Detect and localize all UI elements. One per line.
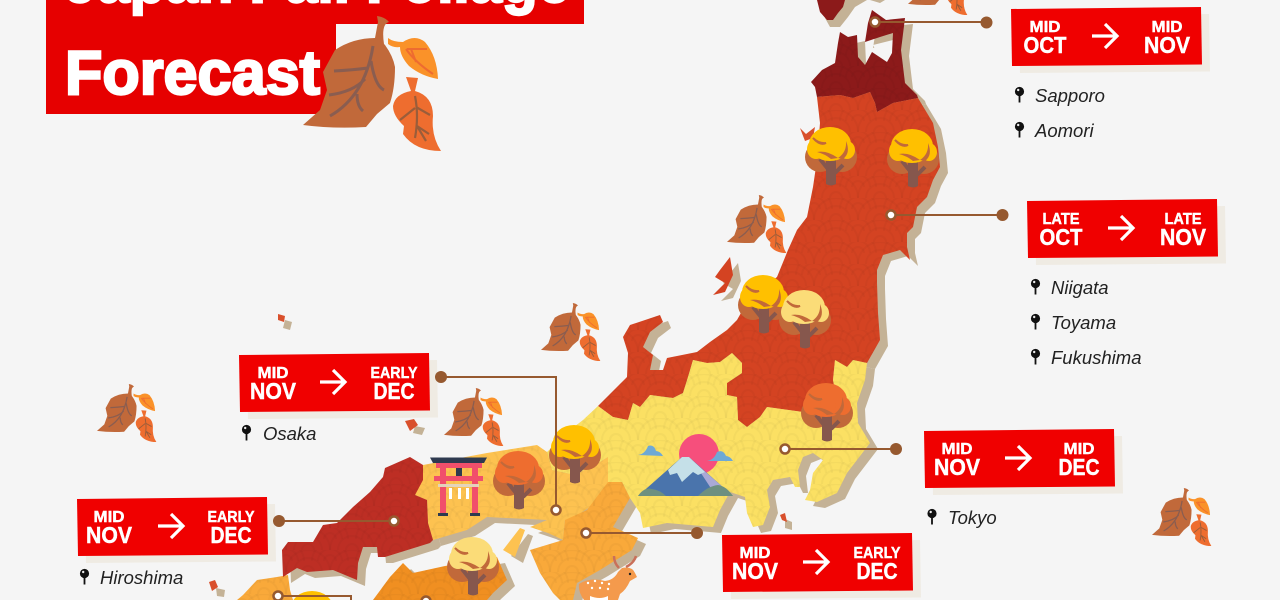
city: Sapporo: Sapporo bbox=[1035, 85, 1105, 106]
badge: late Oct to late Nov bbox=[1027, 199, 1226, 265]
connector: Sapporo Aomori bbox=[870, 16, 992, 28]
icon: leaves sea of Japan bbox=[541, 303, 600, 361]
region: Shikoku bbox=[373, 557, 507, 600]
badge: late Oct to late Nov: NOV bbox=[1160, 224, 1207, 250]
icon: tree Iwate bbox=[887, 129, 939, 188]
badge: Osaka mid Nov to early Dec: EARLY bbox=[370, 365, 418, 382]
connector: Hiroshima bbox=[273, 515, 398, 527]
badge: Tokyo mid Nov to mid Dec: DEC bbox=[1058, 454, 1100, 480]
badge: mid Oct to mid Nov: MID bbox=[1030, 19, 1060, 36]
region: Sado island bbox=[713, 257, 733, 295]
badge: Hiroshima mid Nov to early Dec: NOV bbox=[86, 522, 133, 548]
region: Kii peninsula bbox=[530, 482, 638, 600]
badge: Kii mid Nov to early Dec: EARLY bbox=[854, 545, 901, 562]
city: Aomori: Aomori bbox=[1034, 120, 1094, 141]
region: Chugoku bbox=[282, 457, 433, 580]
icon: deer bbox=[579, 556, 637, 600]
icon: leaves west sea bbox=[444, 388, 503, 446]
badge: Kii mid Nov to early Dec: NOV bbox=[732, 558, 779, 584]
title line 2: Forecast bbox=[65, 39, 320, 108]
region: Kyushu bbox=[237, 575, 340, 600]
map of Japan bbox=[209, 0, 948, 600]
badge: Tokyo mid Nov to mid Dec: NOV bbox=[934, 454, 981, 480]
region: Aomori and northern Tohoku bbox=[811, 10, 918, 112]
badge: Hiroshima mid Nov to early Dec: EARLY bbox=[208, 509, 255, 526]
badge: Hiroshima mid Nov to early Dec: MID bbox=[94, 509, 124, 526]
connector: Niigata Toyama Fukushima bbox=[886, 209, 1008, 221]
region: Kanto and Chubu bbox=[547, 353, 870, 528]
connector: Kii bbox=[582, 527, 703, 539]
badge: Kii mid Nov to early Dec bbox=[722, 533, 921, 599]
icon: Mount Fuji with sun and clouds bbox=[638, 434, 733, 496]
small islands bbox=[209, 127, 815, 591]
icon: tree Akita bbox=[805, 127, 857, 186]
icon: leaves north coast bbox=[727, 195, 786, 253]
badge: late Oct to late Nov: LATE bbox=[1164, 211, 1202, 228]
title block bbox=[46, 0, 584, 114]
city: Osaka: Osaka bbox=[263, 423, 316, 444]
icon: tree Kyushu bbox=[287, 591, 339, 600]
city: Tokyo: Tokyo bbox=[948, 507, 997, 528]
icon: tree Shikoku bbox=[447, 537, 499, 596]
badge: Kii mid Nov to early Dec: DEC bbox=[856, 558, 898, 584]
icon: tree Kansai bbox=[493, 451, 545, 510]
connector: Kyushu bbox=[274, 592, 351, 600]
badge: Osaka mid Nov to early Dec: NOV bbox=[250, 378, 297, 404]
icon: tree Fukushima bbox=[779, 290, 831, 348]
badge: mid Oct to mid Nov: MID bbox=[1152, 19, 1182, 36]
badge: Tokyo mid Nov to mid Dec bbox=[924, 429, 1123, 495]
icon: leaves top bbox=[908, 0, 967, 15]
region: Hokkaido bbox=[817, 0, 845, 20]
connector: Shikoku bbox=[422, 596, 430, 600]
icon: leaves pacific bbox=[1152, 488, 1211, 546]
region: Kansai bbox=[415, 445, 610, 557]
badge: Tokyo mid Nov to mid Dec: MID bbox=[1064, 441, 1094, 458]
city: Hiroshima: Hiroshima bbox=[100, 567, 183, 588]
badge: Tokyo mid Nov to mid Dec: MID bbox=[942, 441, 972, 458]
badge: mid Oct to mid Nov: NOV bbox=[1144, 32, 1191, 58]
region: Tohoku and Niigata bbox=[598, 92, 940, 427]
badge: late Oct to late Nov: OCT bbox=[1040, 224, 1082, 250]
icon: tree Yamagata bbox=[738, 275, 790, 334]
icon: leaves far west bbox=[97, 384, 156, 442]
badge: mid Oct to mid Nov bbox=[1011, 7, 1210, 73]
city: Niigata: Niigata bbox=[1051, 277, 1109, 298]
icon: torii gate bbox=[430, 458, 487, 516]
icon: tree Kyoto east bbox=[549, 425, 601, 484]
city: Fukushima: Fukushima bbox=[1051, 347, 1141, 368]
badge: late Oct to late Nov: LATE bbox=[1042, 211, 1080, 228]
connector: Tokyo bbox=[780, 443, 902, 455]
badge: Hiroshima mid Nov to early Dec bbox=[77, 497, 276, 563]
icon: title leaves bbox=[303, 16, 441, 151]
city: Toyama: Toyama bbox=[1051, 312, 1116, 333]
badge: Osaka mid Nov to early Dec bbox=[239, 353, 438, 419]
badge: Osaka mid Nov to early Dec: DEC bbox=[374, 378, 414, 404]
icon: tree Tochigi bbox=[801, 383, 853, 442]
connector: Osaka bbox=[435, 371, 560, 514]
badge: Osaka mid Nov to early Dec: MID bbox=[258, 365, 288, 382]
badge: Kii mid Nov to early Dec: MID bbox=[740, 545, 770, 562]
badge: mid Oct to mid Nov: OCT bbox=[1024, 32, 1066, 58]
badge: Hiroshima mid Nov to early Dec: DEC bbox=[210, 522, 252, 548]
